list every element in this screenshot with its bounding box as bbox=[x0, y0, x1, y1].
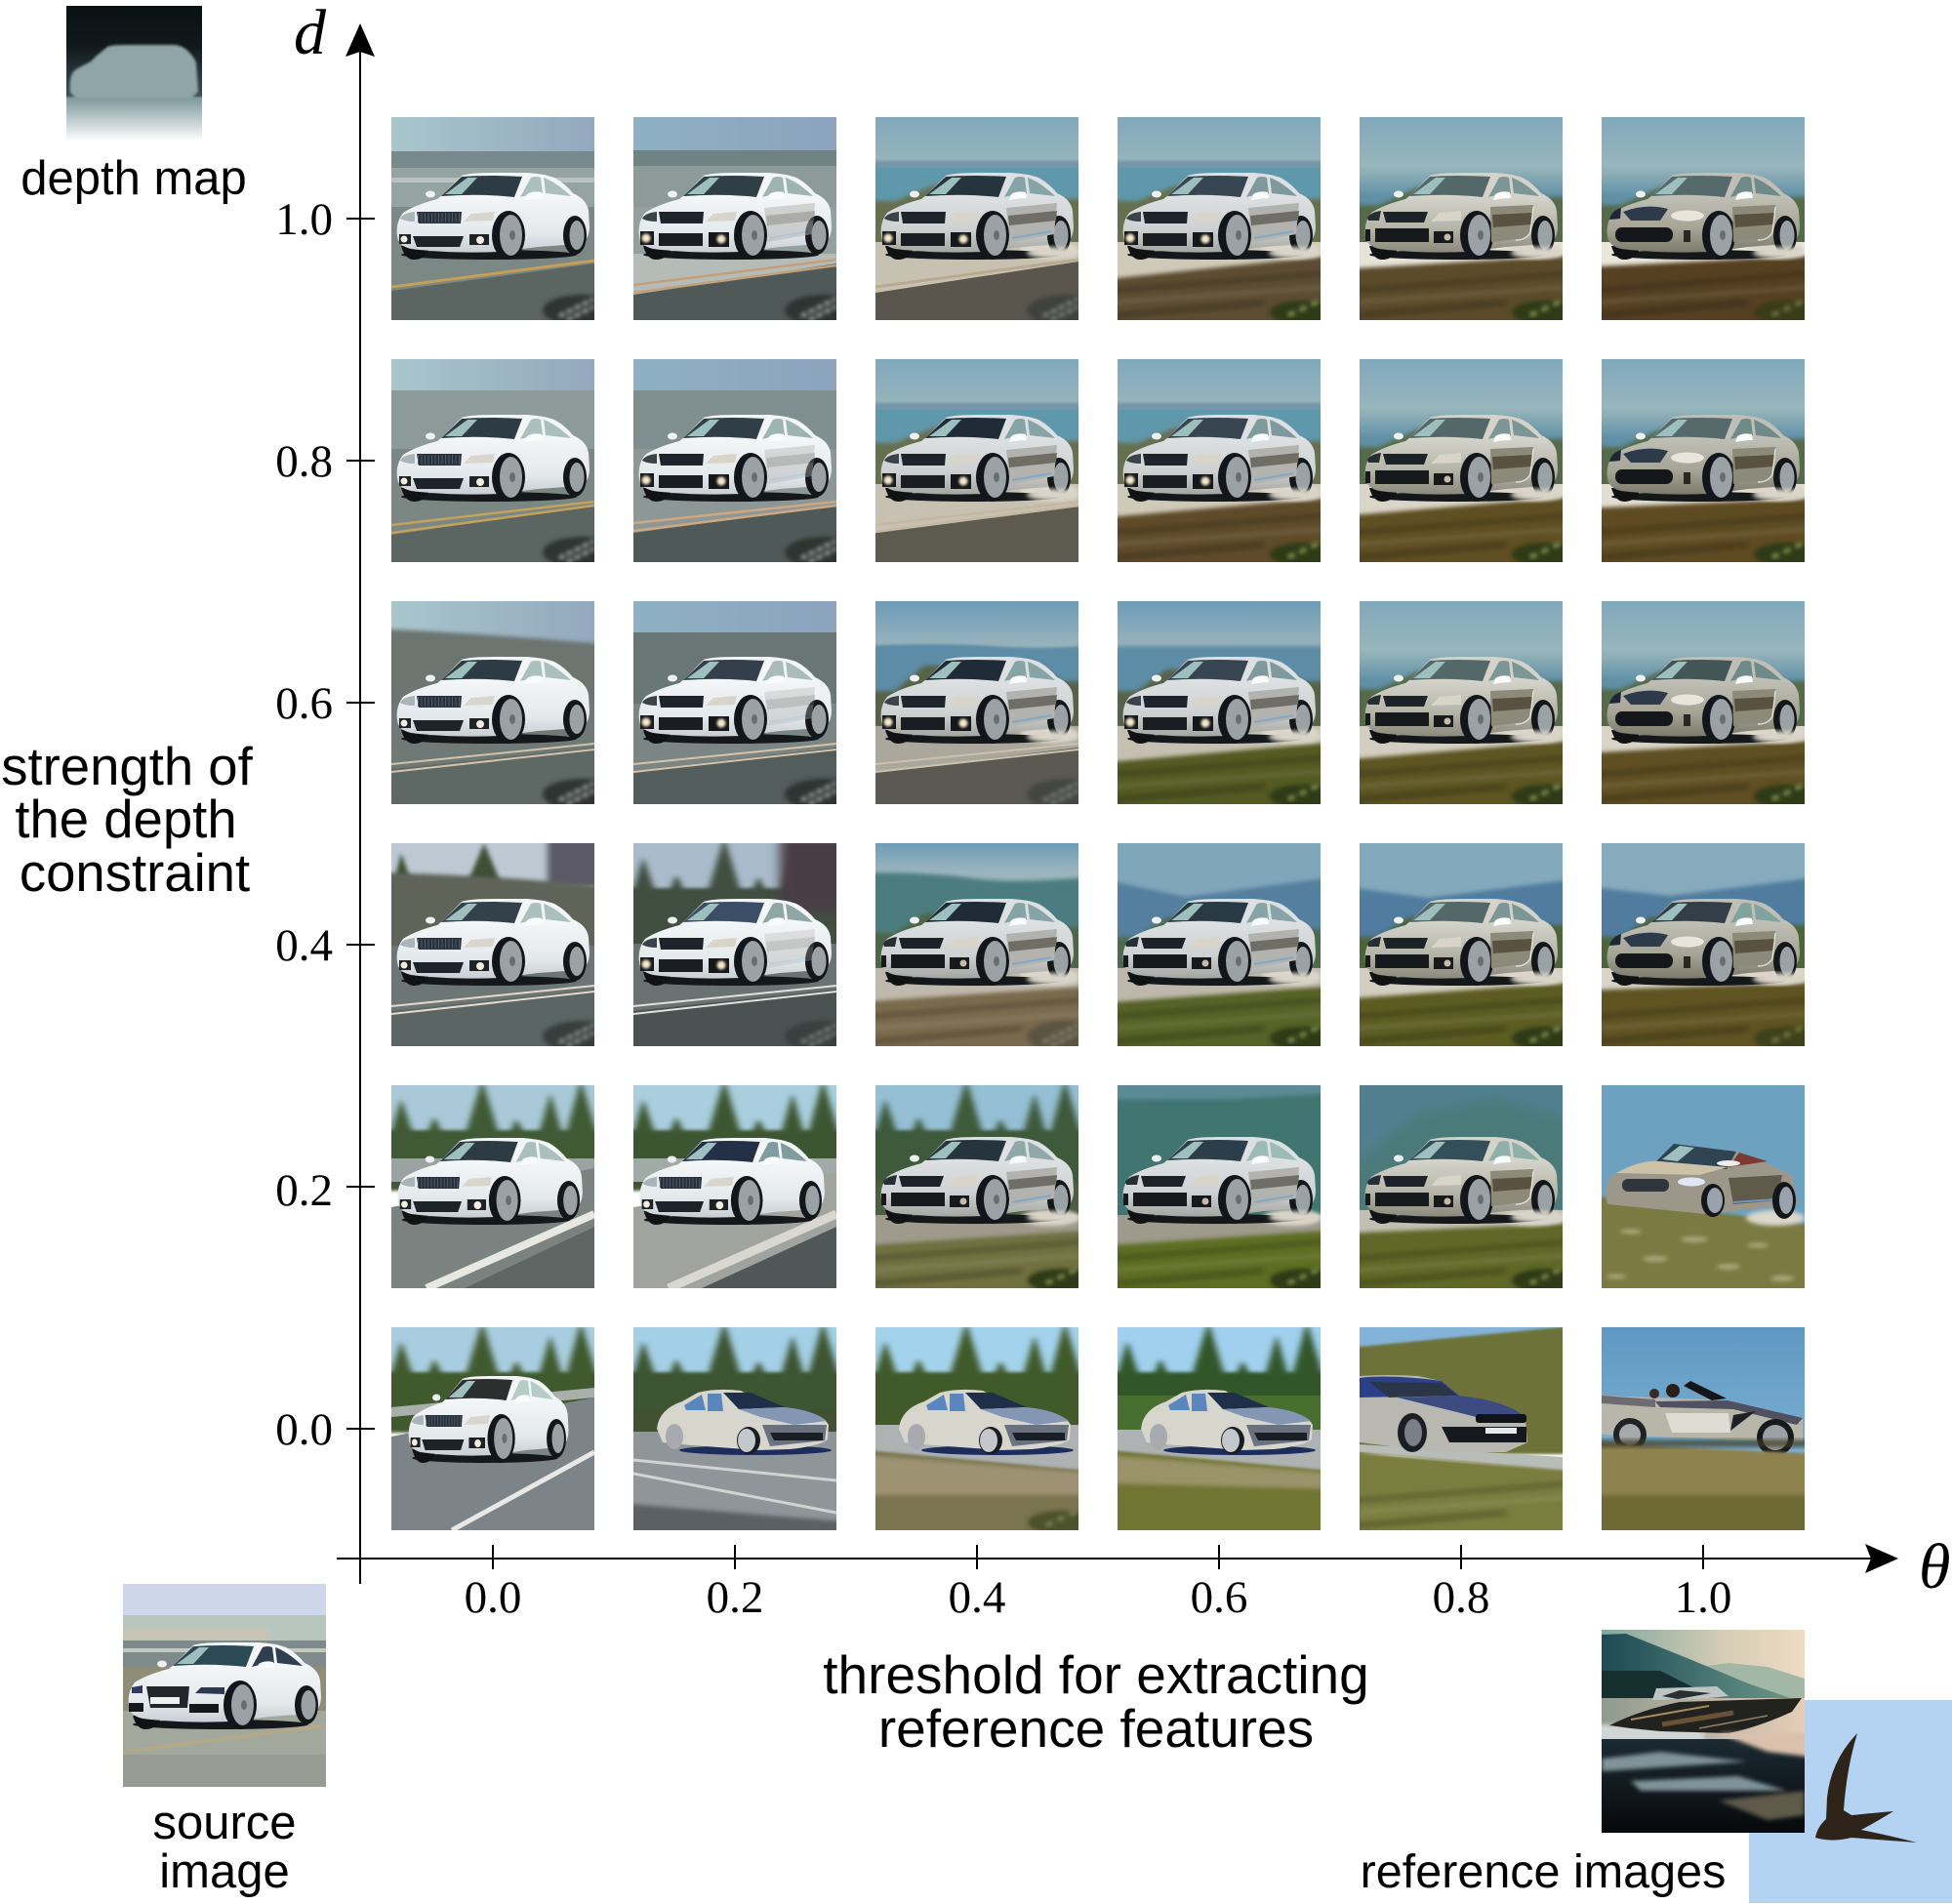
tile d=0.8 t=1.0 bbox=[1602, 359, 1805, 562]
y axis title: strength of bbox=[1, 737, 254, 796]
tile d=0.8 t=0.2 bbox=[633, 359, 836, 562]
reference image: bird bbox=[1749, 1700, 1952, 1903]
tile d=0.2 t=0.6 bbox=[1118, 1085, 1321, 1288]
tile d=0.0 t=0.4 bbox=[875, 1327, 1078, 1530]
tile d=0.6 t=0.8 bbox=[1360, 601, 1563, 804]
tile d=0.0 t=0.0 bbox=[391, 1327, 594, 1530]
tile d=1.0 t=0.6 bbox=[1118, 117, 1321, 320]
reference image: boat bbox=[1582, 1630, 1824, 1833]
y axis numbers: 0.4 bbox=[275, 920, 333, 971]
tile d=0.8 t=0.8 bbox=[1360, 359, 1563, 562]
tile d=1.0 t=0.0 bbox=[391, 117, 594, 320]
tile d=0.4 t=0.2 bbox=[633, 843, 836, 1046]
reference images label: reference images bbox=[1361, 1845, 1726, 1898]
y axis title: the depth bbox=[15, 790, 237, 849]
tile d=1.0 t=0.8 bbox=[1360, 117, 1563, 320]
x axis title: threshold for extracting bbox=[823, 1644, 1369, 1705]
tile d=0.6 t=0.4 bbox=[875, 601, 1078, 804]
x axis numbers: 0.2 bbox=[707, 1572, 763, 1623]
tile d=0.4 t=1.0 bbox=[1602, 843, 1805, 1046]
y axis ticks bbox=[346, 219, 375, 1429]
tile d=0.8 t=0.0 bbox=[391, 359, 594, 562]
x axis numbers bbox=[465, 1572, 1731, 1623]
horizontal axis with arrow bbox=[337, 1544, 1898, 1573]
tile d=0.2 t=0.4 bbox=[875, 1085, 1078, 1288]
x axis numbers: 0.8 bbox=[1433, 1572, 1489, 1623]
y axis numbers: 0.6 bbox=[275, 678, 333, 729]
y axis numbers: 1.0 bbox=[275, 194, 333, 245]
y axis numbers: 0.2 bbox=[275, 1165, 333, 1216]
tile d=0.2 t=1.0 bbox=[1602, 1085, 1805, 1288]
tile d=0.4 t=0.8 bbox=[1360, 843, 1563, 1046]
tile d=0.6 t=0.6 bbox=[1118, 601, 1321, 804]
depth map label: depth map bbox=[20, 152, 247, 205]
x axis title: reference features bbox=[878, 1698, 1314, 1759]
axis label theta: θ bbox=[1919, 1531, 1950, 1602]
tile d=1.0 t=1.0 bbox=[1602, 117, 1805, 320]
x axis numbers: 0.6 bbox=[1191, 1572, 1247, 1623]
tile d=0.2 t=0.8 bbox=[1360, 1085, 1563, 1288]
y axis title: constraint bbox=[20, 843, 250, 903]
y axis numbers: 0.0 bbox=[275, 1404, 333, 1455]
source image label: source bbox=[152, 1797, 297, 1849]
source image bbox=[123, 1584, 326, 1787]
tile d=0.0 t=0.6 bbox=[1118, 1327, 1321, 1530]
tile d=0.6 t=1.0 bbox=[1602, 601, 1805, 804]
tile d=0.8 t=0.4 bbox=[875, 359, 1078, 562]
tile d=0.4 t=0.4 bbox=[875, 843, 1078, 1046]
x axis ticks bbox=[493, 1545, 1703, 1569]
tile d=0.6 t=0.2 bbox=[633, 601, 836, 804]
vertical axis with arrow bbox=[346, 23, 375, 1584]
tile d=1.0 t=0.2 bbox=[633, 117, 836, 320]
tile d=0.0 t=0.2 bbox=[633, 1327, 836, 1530]
source image label: image bbox=[159, 1845, 290, 1898]
tile d=0.0 t=0.8 bbox=[1340, 1325, 1582, 1552]
x axis numbers: 0.4 bbox=[949, 1572, 1005, 1623]
tile d=0.8 t=0.6 bbox=[1118, 359, 1321, 562]
y axis numbers bbox=[275, 194, 333, 1455]
tile d=0.2 t=0.0 bbox=[391, 1085, 594, 1288]
tile d=0.0 t=1.0 bbox=[1582, 1327, 1824, 1552]
tile d=0.4 t=0.6 bbox=[1118, 843, 1321, 1046]
x axis numbers: 1.0 bbox=[1675, 1572, 1731, 1623]
tile d=0.2 t=0.2 bbox=[633, 1085, 836, 1288]
tile d=0.6 t=0.0 bbox=[391, 601, 594, 804]
tile d=0.4 t=0.0 bbox=[391, 843, 594, 1046]
y axis numbers: 0.8 bbox=[275, 436, 333, 487]
x axis numbers: 0.0 bbox=[465, 1572, 521, 1623]
depth map image bbox=[66, 6, 202, 142]
tile d=1.0 t=0.4 bbox=[875, 117, 1078, 320]
